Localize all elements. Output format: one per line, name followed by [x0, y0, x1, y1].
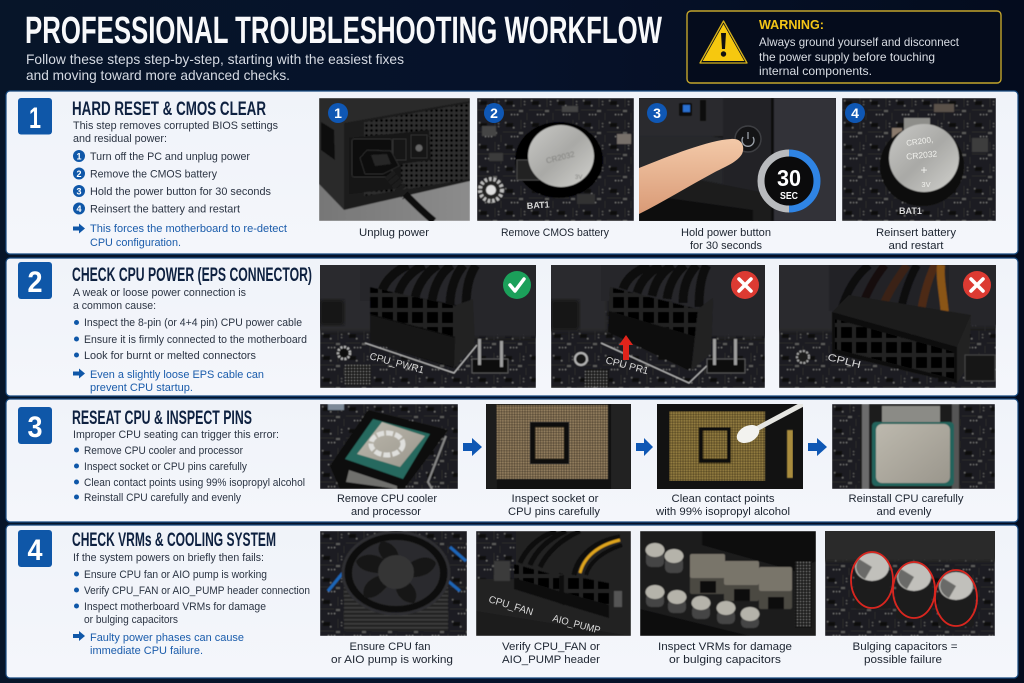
photo: hold power button with 30 second timer — [639, 98, 836, 221]
warning text: internal components. — [759, 64, 872, 78]
captions: Bulging capacitors = — [852, 641, 958, 653]
captions — [331, 641, 958, 666]
caption: and restart — [888, 240, 944, 252]
step number 3: 3 — [28, 411, 42, 444]
subtitle — [26, 51, 404, 83]
badge 2: 2 — [490, 105, 498, 121]
battery engraving: CR2032 — [906, 148, 938, 162]
intro text: If the system powers on briefly then fails: — [73, 552, 264, 564]
numbered list: 2 — [76, 169, 82, 179]
icon: warning triangle — [700, 21, 747, 63]
silkscreen labels: CPU_FAN — [487, 594, 534, 618]
numbered list: 3 — [76, 186, 82, 196]
battery engraving: 3V — [921, 180, 931, 189]
subtitle: and moving toward more advanced checks. — [26, 67, 290, 83]
caption — [876, 227, 957, 252]
note with arrow: Faulty power phases can cause — [90, 632, 244, 644]
photo: remove CMOS battery: 3V — [575, 175, 582, 181]
battery engraving — [906, 135, 938, 189]
note with arrow: immediate CPU failure. — [90, 645, 203, 657]
intro text — [73, 120, 278, 145]
caption: Unplug power — [359, 227, 429, 239]
captions: Ensure CPU fan — [350, 641, 430, 653]
silkscreen labels — [487, 594, 602, 637]
captions: with 99% isopropyl alcohol — [655, 506, 790, 518]
warning text: the power supply before touching — [759, 50, 935, 64]
icon: green check — [503, 271, 531, 299]
bullet list: Clean contact points using 99% isopropyl alcohol — [84, 477, 305, 489]
photo: remove CMOS battery: CR2032 — [545, 150, 576, 165]
captions — [337, 493, 964, 518]
caption: for 30 seconds — [690, 240, 762, 252]
note with arrow: prevent CPU startup. — [90, 382, 193, 394]
30 second timer: 30 — [777, 165, 801, 191]
captions: Reinstall CPU carefully — [848, 493, 964, 505]
photo: burnt connector — [779, 265, 996, 388]
note with arrow: CPU configuration. — [90, 237, 181, 249]
photo: fan headers — [476, 531, 631, 637]
bullet list: Ensure it is firmly connected to the motherboard — [84, 334, 307, 346]
note with arrow — [73, 368, 264, 394]
warning text — [759, 35, 960, 78]
numbered list: 4 — [76, 204, 82, 214]
finger — [639, 139, 743, 214]
bullet list — [74, 317, 307, 362]
photo: CPU with thermal paste — [320, 404, 458, 489]
numbered list: Reinsert the battery and restart — [90, 204, 240, 216]
caption: Hold power button — [681, 227, 771, 239]
bullet list: Remove CPU cooler and processor — [84, 445, 243, 457]
captions: or AIO pump is working — [331, 654, 453, 666]
silkscreen label: CPU_PWR1 — [368, 351, 426, 377]
photo: unplug power — [319, 98, 470, 221]
icon: red cross — [731, 271, 759, 299]
caption: Reinsert battery — [876, 227, 957, 239]
numbered list: Remove the CMOS battery — [90, 168, 217, 180]
silkscreen label: BAT1 — [526, 199, 550, 211]
silkscreen label: BAT1 — [899, 206, 922, 216]
cotton swab — [734, 404, 803, 447]
captions: Inspect VRMs for damage — [658, 641, 792, 653]
captions: Clean contact points — [672, 493, 775, 505]
captions: AIO_PUMP header — [502, 654, 600, 666]
battery engraving: CR200, — [906, 135, 934, 148]
intro text: a common cause: — [73, 300, 156, 312]
power button — [735, 126, 761, 152]
silkscreen label: CPLH — [826, 352, 862, 371]
captions: and processor — [351, 506, 421, 518]
warning heading: WARNING: — [759, 17, 824, 32]
captions: Remove CPU cooler — [337, 493, 437, 505]
caption — [681, 227, 771, 252]
arrow — [636, 438, 653, 456]
photo: connector loose — [551, 265, 765, 388]
30 second timer: SEC — [780, 191, 798, 202]
caption: Remove CMOS battery — [501, 227, 609, 239]
numbered list: Turn off the PC and unplug power — [90, 151, 250, 163]
bullet list: Inspect the 8-pin (or 4+4 pin) CPU power cable — [84, 317, 302, 329]
step number 4 — [18, 530, 52, 567]
intro text: This step removes corrupted BIOS settings — [73, 120, 278, 132]
captions: or bulging capacitors — [669, 654, 782, 666]
badge 3 — [647, 103, 667, 123]
intro text: Improper CPU seating can trigger this error: — [73, 429, 279, 441]
icon: red cross — [963, 271, 991, 299]
badge 4: 4 — [851, 105, 859, 121]
photo: CPU socket — [486, 404, 631, 489]
photo: VRM capacitors — [640, 531, 816, 636]
silkscreen label: CPU PR1 — [604, 355, 650, 377]
numbered list: 1 — [76, 152, 82, 162]
captions: possible failure — [864, 654, 942, 666]
heading: CHECK CPU POWER (EPS CONNECTOR) — [72, 265, 312, 286]
warning callout — [687, 11, 1001, 83]
panel: step 2 CPU power — [6, 258, 1018, 396]
bullet list: Inspect socket or CPU pins carefully — [84, 461, 247, 473]
captions: Inspect socket or — [512, 493, 599, 505]
captions: Verify CPU_FAN or — [502, 641, 600, 653]
heading: RESEAT CPU & INSPECT PINS — [72, 408, 252, 429]
heading: CHECK VRMs & COOLING SYSTEM — [72, 530, 276, 551]
step number 3 — [18, 407, 52, 444]
captions: and evenly — [876, 506, 932, 518]
step number 1: 1 — [29, 102, 41, 135]
intro text — [73, 287, 246, 312]
note with arrow — [73, 631, 244, 657]
battery engraving: + — [920, 163, 928, 177]
step number 4: 4 — [28, 534, 43, 567]
photo: CPU fan — [320, 531, 467, 636]
subtitle: Follow these steps step-by-step, starting with the easiest fixes — [26, 51, 404, 67]
photo: reinsert battery — [842, 98, 996, 221]
photo: bulging capacitors — [825, 531, 995, 636]
badge 1: 1 — [334, 105, 342, 121]
bullet list — [74, 445, 305, 504]
photo: reinstalled CPU — [832, 404, 995, 489]
note with arrow: Even a slightly loose EPS cable can — [90, 369, 264, 381]
bullet list: Inspect motherboard VRMs for damage — [84, 601, 266, 613]
photo: remove CMOS battery — [477, 98, 634, 221]
title: PROFESSIONAL TROUBLESHOOTING WORKFLOW — [25, 10, 662, 52]
bullet list: Ensure CPU fan or AIO pump is working — [84, 569, 267, 581]
photo: cleaning socket with swab — [657, 404, 803, 489]
arrow — [463, 438, 482, 456]
bullet list: Look for burnt or melted connectors — [84, 350, 256, 362]
captions: CPU pins carefully — [508, 506, 600, 518]
panel: step 1 hard reset — [6, 91, 1018, 254]
heading: HARD RESET & CMOS CLEAR — [72, 99, 266, 120]
header: title and intro — [25, 10, 662, 83]
bullet list: Verify CPU_FAN or AIO_PUMP header connection — [84, 585, 310, 597]
step number 1 — [18, 98, 52, 135]
note with arrow: This forces the motherboard to re-detect — [90, 223, 287, 235]
arrow — [808, 438, 827, 456]
badge 4 — [845, 103, 865, 123]
photo: connector seated correctly — [320, 265, 536, 388]
step number 2 — [18, 262, 52, 299]
panel: step 3 reseat CPU — [6, 399, 1018, 522]
red highlight circles — [851, 552, 977, 626]
note with arrow — [73, 223, 287, 249]
badge 2 — [484, 103, 504, 123]
intro text: and residual power: — [73, 133, 167, 145]
numbered list: Hold the power button for 30 seconds — [90, 186, 271, 198]
numbered list — [73, 150, 271, 216]
warning text: Always ground yourself and disconnect — [759, 35, 960, 49]
bullet list: or bulging capacitors — [84, 614, 178, 626]
bullet list — [74, 569, 310, 626]
intro text: A weak or loose power connection is — [73, 287, 246, 299]
badge 3: 3 — [653, 105, 661, 121]
icon: red up arrow — [619, 335, 633, 360]
step number 2: 2 — [28, 266, 42, 299]
badge 1 — [328, 103, 348, 123]
bullet list: Reinstall CPU carefully and evenly — [84, 492, 241, 504]
silkscreen labels: AIO_PUMP — [551, 613, 602, 637]
panel: step 4 VRMs and cooling — [6, 525, 1018, 678]
30 second timer — [758, 150, 820, 212]
